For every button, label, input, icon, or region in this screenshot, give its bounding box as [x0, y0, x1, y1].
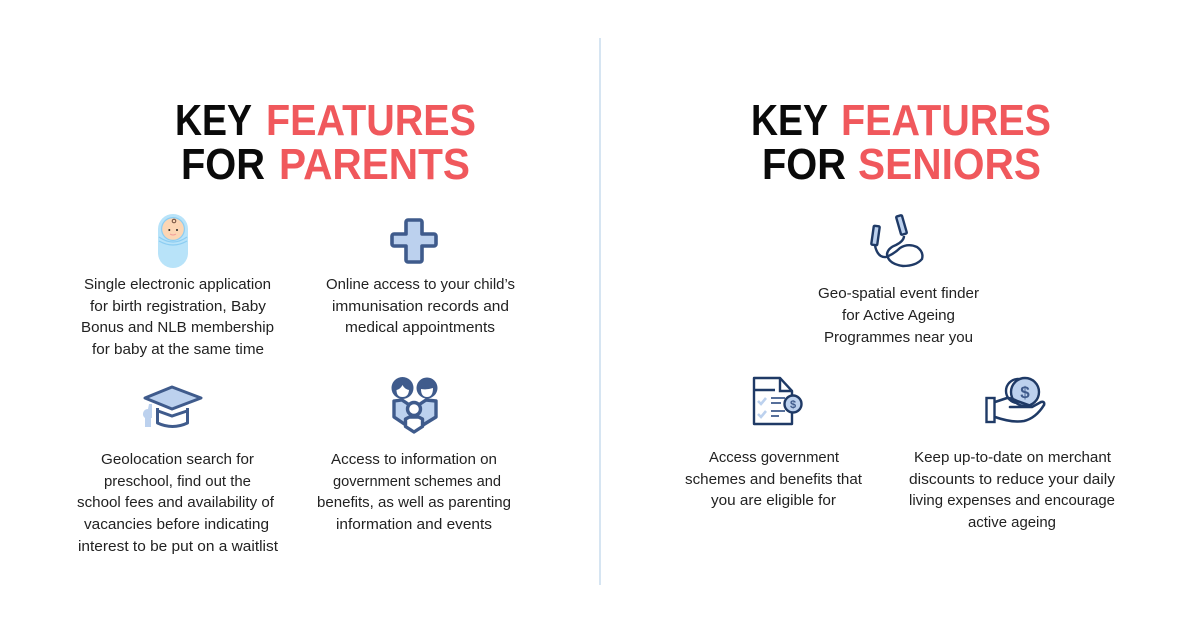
heading: key features for seniors: SENIORS — [858, 141, 1041, 189]
text: birth registration: for birth registration, Baby — [90, 298, 266, 315]
heading: key features for seniors — [751, 97, 1051, 189]
text: merchant discounts: active ageing — [968, 514, 1056, 531]
text: parenting information: information and events — [336, 516, 492, 533]
text: government schemes — [685, 449, 863, 509]
text: government schemes: Access government — [709, 449, 840, 466]
text: merchant discounts: Keep up-to-date on merchant — [914, 449, 1112, 466]
text: birth registration — [81, 276, 274, 358]
text: event finder: Programmes near you — [824, 329, 973, 346]
text: event finder: Geo-spatial event finder — [818, 285, 979, 302]
text: birth registration: Single electronic application — [84, 276, 271, 293]
icon: skipping rope — [871, 215, 922, 266]
text: parenting information: Access to information on — [331, 451, 497, 468]
icon: graduation cap — [143, 387, 201, 427]
text: preschool search: preschool, find out the — [104, 473, 251, 490]
text: preschool search — [77, 451, 279, 555]
text: preschool search: vacancies before indicating — [84, 516, 269, 533]
text: government schemes: you are eligible for — [711, 492, 836, 509]
text: preschool search: Geolocation search for — [101, 451, 254, 468]
icon: document with checklist and dollar coin — [754, 378, 802, 424]
icon: hand holding coins — [986, 378, 1044, 422]
heading: key features for seniors: FEATURES — [841, 97, 1051, 145]
text: merchant discounts: discounts to reduce your daily — [909, 471, 1115, 488]
text: merchant discounts: living expenses and encourage — [909, 492, 1115, 509]
text: event finder — [818, 285, 979, 346]
text: immunisation records: immunisation records and — [332, 298, 509, 315]
heading: key features for seniors: KEY — [751, 97, 828, 145]
heading: key features for parents: FOR — [181, 141, 265, 189]
heading: key features for seniors: FOR — [762, 141, 846, 189]
text: immunisation records — [326, 276, 515, 336]
icon: family — [392, 377, 438, 432]
text: birth registration: for baby at the same time — [92, 341, 264, 358]
text: event finder: for Active Ageing — [842, 307, 955, 324]
heading: key features for parents: FEATURES — [266, 97, 476, 145]
heading: key features for parents: PARENTS — [279, 141, 470, 189]
text: preschool search: school fees and availability of — [77, 494, 275, 511]
heading: key features for parents: KEY — [175, 97, 252, 145]
text: immunisation records: medical appointments — [345, 319, 495, 336]
text: parenting information: benefits, as well as parenting — [317, 494, 511, 511]
text: immunisation records: Online access to your child’s — [326, 276, 515, 293]
icon: hand holding coins: $ — [1020, 383, 1030, 402]
icon: document with checklist and dollar coin: $ — [790, 399, 796, 411]
icon: swaddled baby — [158, 214, 188, 268]
text: birth registration: Bonus and NLB membership — [81, 319, 274, 336]
heading: key features for parents — [175, 97, 476, 189]
text: merchant discounts — [909, 449, 1115, 531]
text: parenting information — [317, 451, 511, 533]
text: preschool search: interest to be put on a waitlist — [78, 538, 279, 555]
icon: medical cross — [392, 220, 436, 262]
text: government schemes: schemes and benefits that — [685, 471, 863, 488]
text: parenting information: government schemes and — [333, 473, 501, 490]
